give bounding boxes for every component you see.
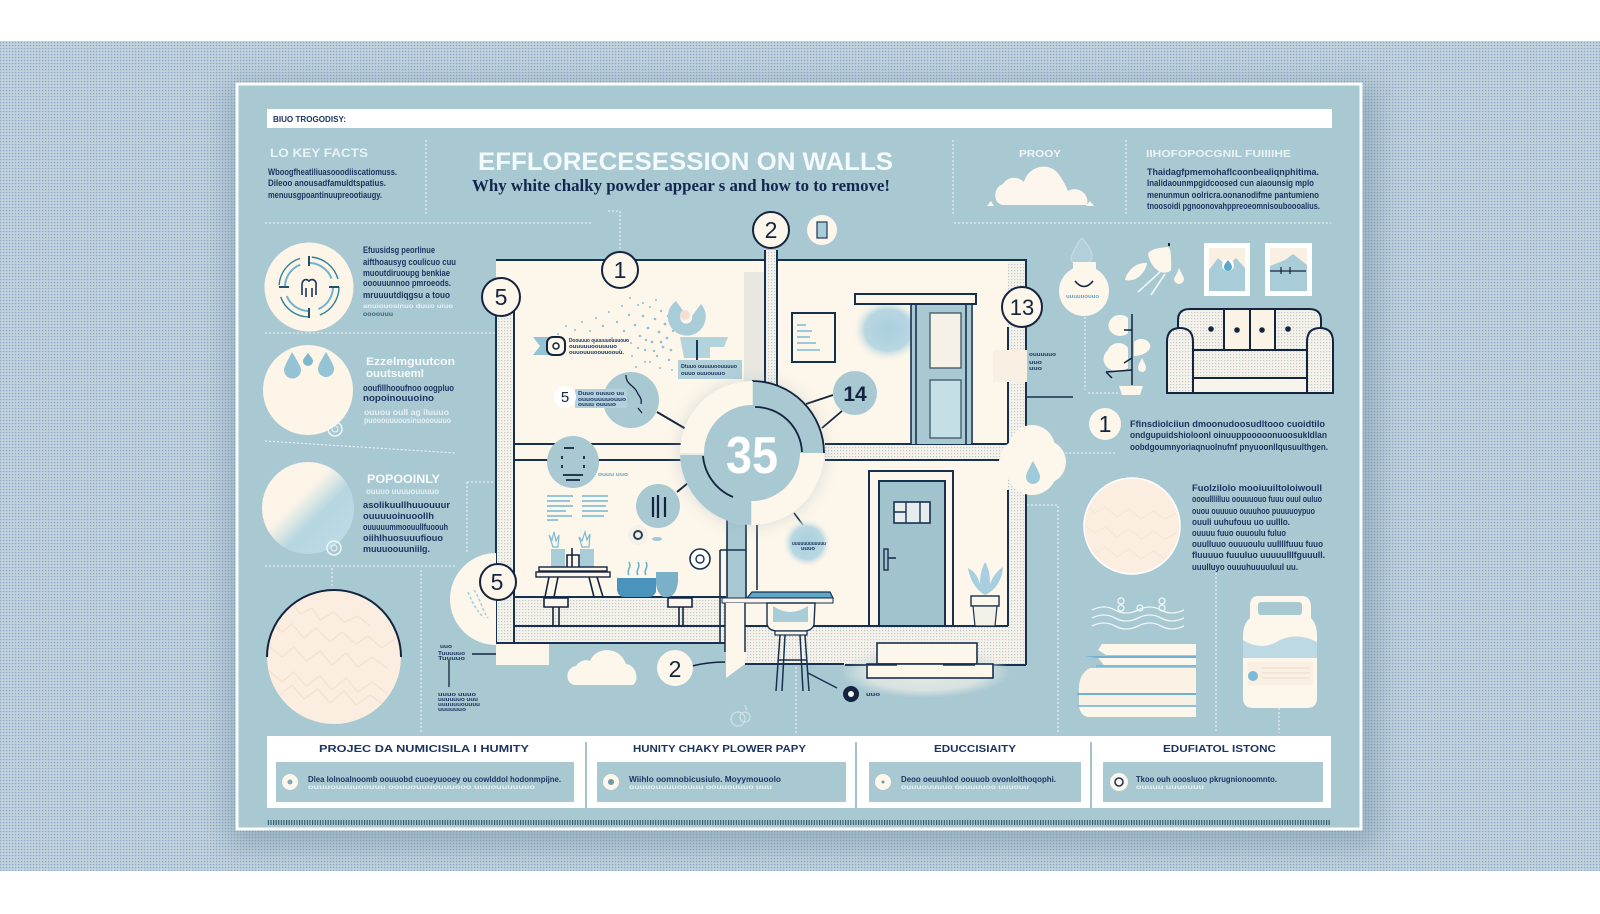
text block: circle two: nopoinouuoino <box>363 393 435 403</box>
card four <box>1103 744 1323 802</box>
text block: circle two: ouutsueml <box>366 368 424 380</box>
card two <box>597 744 846 802</box>
center dial: 35: 35 <box>726 427 778 485</box>
icon: detergent jug <box>1243 596 1317 708</box>
panel: environmental text: Thaidagfpmemohaflcoonbealiqnphitima. <box>1147 167 1319 177</box>
numbered marker: two bottom <box>657 650 725 686</box>
icon: t-shape sign: Dtuuo ouuuuoouuuuo <box>681 364 737 370</box>
blob: cream drop <box>1000 425 1066 495</box>
bottom left cream circle with marker 5 <box>450 553 516 645</box>
table with cups <box>536 532 692 626</box>
panel: key facts: Wboogfheatiliuasooodiiscatiomuss. <box>268 167 397 177</box>
text block: texture note: ouuIIuuo ouuuouIu uuIIIIfuuu fuuo <box>1192 539 1323 549</box>
icon: plate circle <box>547 436 628 488</box>
numbered marker: two bottom: 2 <box>669 656 681 682</box>
callout: tiny badge <box>808 673 880 702</box>
panel: bottom summary <box>267 736 1331 808</box>
icon: bust: uuuuuouuo <box>1066 294 1099 300</box>
text block: circle one: ooouuunnoo pmroeods. <box>363 278 451 288</box>
text block: circle two: Ezzelmguutcon <box>366 356 455 368</box>
text block: texture note: ouuli uuhufouu uo uuIIIo. <box>1192 517 1290 527</box>
icon: t-shape sign <box>678 337 742 379</box>
card one <box>276 744 574 802</box>
icon: plate circle: ouuu uuo <box>598 472 628 478</box>
floor note with tiny labels: Tuuuuuo <box>438 651 465 657</box>
callout: five with circle: ouuu ouuuo <box>578 402 616 408</box>
pictures <box>1204 243 1312 296</box>
panel: environmental text: IIHOFOPOCGNIL FUIIIIHE <box>1146 148 1291 160</box>
icon: fork circle <box>636 483 688 528</box>
callout: tiny badge: uuo <box>866 692 880 698</box>
panel: main poster <box>237 84 1361 829</box>
panel: environmental text: tnoosoidi pgnoonovahppreoeomnisouboooalius. <box>1147 201 1320 211</box>
callout: five with circle: 5 <box>561 389 569 406</box>
callout: five with circle <box>554 372 686 429</box>
text block: circle three: muuuoouuniilg. <box>363 544 430 554</box>
icon: small triangles <box>987 201 1094 206</box>
text block: circle two <box>363 356 455 425</box>
front door <box>869 471 953 626</box>
icon: sofa <box>1167 309 1333 393</box>
panel: key facts <box>268 146 397 200</box>
text block: circle one: anuiouosinuo duuo uiuo <box>363 304 453 310</box>
numbered marker: five upper: 5 <box>495 284 507 310</box>
text block: texture note: ooouIIliIIuu oouuuouo fuuu ouuI ouIuo <box>1192 494 1322 504</box>
moisture patch: uuuuuuuuuuuu <box>792 541 826 547</box>
illustration: house cross-section <box>496 250 1073 702</box>
radiator block: uuo <box>1029 360 1042 366</box>
card one: Dlea lolnoalnoomb oouuobd cuoeyuooey ou cowlddol hodonmpijne. <box>308 775 561 784</box>
text block: circle two: ooufiIIhooufnoo oogpluo <box>363 383 454 393</box>
text block: circle three: ouuuuoinuooIlh <box>363 511 434 521</box>
numbered marker: two top <box>753 212 789 248</box>
header bar: BIUO TROGODISY: <box>273 115 346 124</box>
icon: clipboard <box>807 215 837 245</box>
moisture patch <box>782 513 832 568</box>
card three: ouuuouuuuo ouuuuuoo uuuouu <box>901 785 1029 791</box>
card three: EDUCCISIAITY <box>934 744 1016 755</box>
splatter <box>557 297 674 371</box>
icon: stacked boards <box>1077 644 1196 717</box>
circle: diagram icon <box>264 242 354 332</box>
panel: key facts: LO KEY FACTS <box>270 146 368 160</box>
floor note with tiny labels: uuo <box>440 644 452 650</box>
icon: bust <box>1059 238 1109 316</box>
panel: proof with cloud <box>995 149 1087 205</box>
icon: water waves <box>1092 598 1184 629</box>
panel: environmental text <box>1146 148 1320 211</box>
door with window <box>855 294 976 444</box>
desk and stool <box>722 592 833 691</box>
text block: texture note: ouou ouuuuo ouuuhoo puuuuoypuo <box>1192 506 1315 516</box>
center dial: 35 <box>680 381 824 525</box>
panel: key facts: menuusgpoantinuupreootiaugy. <box>268 190 382 200</box>
damp patch <box>852 298 924 362</box>
callout: ribbon: ouuuuuoouuuuo <box>569 344 617 350</box>
numbered note: one: ondgupuidshioloonl oinuuppooooonuoosukIdlan <box>1130 430 1327 440</box>
card two: Wiihlo oomnobicusiulo. Moyymouoolo <box>629 775 781 784</box>
numbered marker: two top: 2 <box>765 217 777 243</box>
numbered note: one <box>1089 408 1328 452</box>
text block: circle two: puooouuuousinuooouuuo <box>364 416 451 425</box>
floor note with tiny labels: uuuo uuuo <box>438 692 476 698</box>
card two: ouuuouuuuoouuu oouuouuuo uuu <box>629 785 772 791</box>
numbered marker: thirteen: 13 <box>1010 295 1034 320</box>
icon: faint swirl <box>731 705 750 726</box>
radiator block <box>993 350 1073 397</box>
header bar <box>267 109 1332 128</box>
text block: circle one: muoutdiruoupg benkiae <box>363 268 450 278</box>
card one: ouuuouuuuoouuu oouuouuuouuuooo uuuouuuuuuo <box>308 785 536 791</box>
card four: ouuuu uuuouuu <box>1136 785 1204 791</box>
text block: circle three: ouuuo uuuuouuuuo <box>366 487 439 496</box>
text block: texture note <box>1192 483 1325 572</box>
text block: circle one <box>363 245 456 318</box>
panel: key facts: Dileoo anousadfamuldtspatius. <box>268 178 386 188</box>
bottom left cream circle with marker 5: 5 <box>491 569 503 595</box>
building walls <box>496 250 1026 665</box>
text block: circle one: Efuusidsg peorlinue <box>363 245 435 255</box>
subtitle: Why white chalky powder appear s and how to to remove! <box>472 176 890 195</box>
numbered marker: fourteen <box>806 371 877 428</box>
radiator block: ouuuuuo <box>1029 352 1056 358</box>
bowls <box>617 562 678 597</box>
title: EFFLORECESESSION ON WALLS <box>478 148 893 176</box>
moisture patch: uuuo <box>801 546 815 552</box>
card four: Tkoo ouh ooosluoo pkrugnionoomnto. <box>1136 775 1277 784</box>
panel: environmental text: menunmun oolricra.oonanodifme pantumieno <box>1147 190 1319 200</box>
text block: texture note: ouuuu fuuo ouuouIu fuIuo <box>1192 528 1286 538</box>
tick strip <box>267 820 1331 825</box>
numbered marker: one: 1 <box>614 257 626 283</box>
icon: cloud <box>995 167 1087 205</box>
card three <box>869 744 1081 802</box>
text block: circle three: POPOOINLY <box>367 474 440 486</box>
callout: five with circle: ouuouuuuouuo <box>578 397 626 403</box>
text block: circle one: oooouuu <box>363 312 393 318</box>
floor note with tiny labels: Tuuuuo <box>438 656 465 662</box>
floor note with tiny labels: uuuuuuo uuu <box>438 697 478 703</box>
text block: circle three: ouuuuummoouuIIfuoouh <box>363 522 448 532</box>
text block: texture note: uuuIIuyo ouuuhuuuuIuuI uu. <box>1192 562 1298 572</box>
text block: texture note: Fuolzilolo mooiuuiltoIoiwoull <box>1192 483 1322 493</box>
icon: lamp <box>1125 243 1184 295</box>
numbered note: one: oobdgoumnyoriaqnuoInufnf pnyuoonlIqusuulthgen. <box>1130 442 1328 452</box>
pipe and column <box>720 520 757 643</box>
floor note with tiny labels: uuuuuuouuuu <box>438 702 480 708</box>
numbered note: one: Ffinsdiolciiun dmoonudoosudltooo cuoidtiIo <box>1130 419 1326 429</box>
text block: circle two: ouuou ouII ag iluuuo <box>364 408 449 417</box>
small gauge icon <box>690 549 710 569</box>
icon: house plant <box>1104 314 1150 395</box>
callout: ribbon: Doouuuo ouuuuuouuuouo <box>569 338 629 344</box>
text block: circle three <box>363 474 451 554</box>
icon: t-shape sign: ouuo ouuouuuo <box>681 371 725 377</box>
potted plant <box>968 562 1003 626</box>
text block: circle three: asoIikuulIhuuouuur <box>363 500 451 510</box>
title <box>472 148 893 195</box>
icon: floor cloud <box>567 650 637 685</box>
card two: HUNITY CHAKY PLOWER PAPY <box>633 744 806 755</box>
text block: circle one: mruuuutdiqgsu a touo <box>363 290 450 300</box>
numbered marker: five upper <box>482 278 520 316</box>
numbered note: one: 1 <box>1099 411 1111 437</box>
blue text blocks <box>547 496 608 520</box>
floor note with tiny labels: uuuuuuo <box>438 707 466 713</box>
radiator block: uuo <box>1029 366 1042 372</box>
floor note with tiny labels <box>438 644 549 713</box>
callout: five with circle: Duuo ouuuo uu <box>578 391 624 397</box>
text block: circle one: aifthoausyg coulicuo cuu <box>363 257 456 267</box>
card one: PROJEC DA NUMICISILA I HUMITY <box>319 744 529 755</box>
dashed guide lines <box>265 140 1331 733</box>
icon: small drop <box>628 525 662 545</box>
callout: ribbon: ouuouuuoouuoouu. <box>569 350 625 356</box>
entry steps <box>840 643 1010 698</box>
circle: wall texture small <box>1084 478 1180 574</box>
card four: EDUFIATOL ISTONC <box>1163 744 1276 755</box>
card three: Deoo oeuuhlod oouuob ovonIoIthoqophi. <box>901 775 1056 784</box>
text block: texture note: fIuuuuo fuuuIuo uuuuuIIIfguuuII. <box>1192 550 1325 560</box>
circle: large texture <box>267 590 401 724</box>
numbered marker: fourteen: 14 <box>843 383 867 406</box>
picture frame <box>792 313 835 362</box>
circle: powder gradient <box>262 462 354 555</box>
callout: ribbon <box>533 337 629 356</box>
icon: ring <box>668 301 706 336</box>
numbered marker: thirteen <box>1002 287 1042 327</box>
panel: environmental text: Inalidaounmpgidcoosed cun aiaounsig mplo <box>1147 178 1314 188</box>
panel: proof with cloud: PROOY <box>1019 149 1061 160</box>
numbered marker: one <box>602 252 638 288</box>
circle: water drops <box>263 345 353 436</box>
text block: circle three: oiihIhuosuuufiouo <box>363 533 444 543</box>
